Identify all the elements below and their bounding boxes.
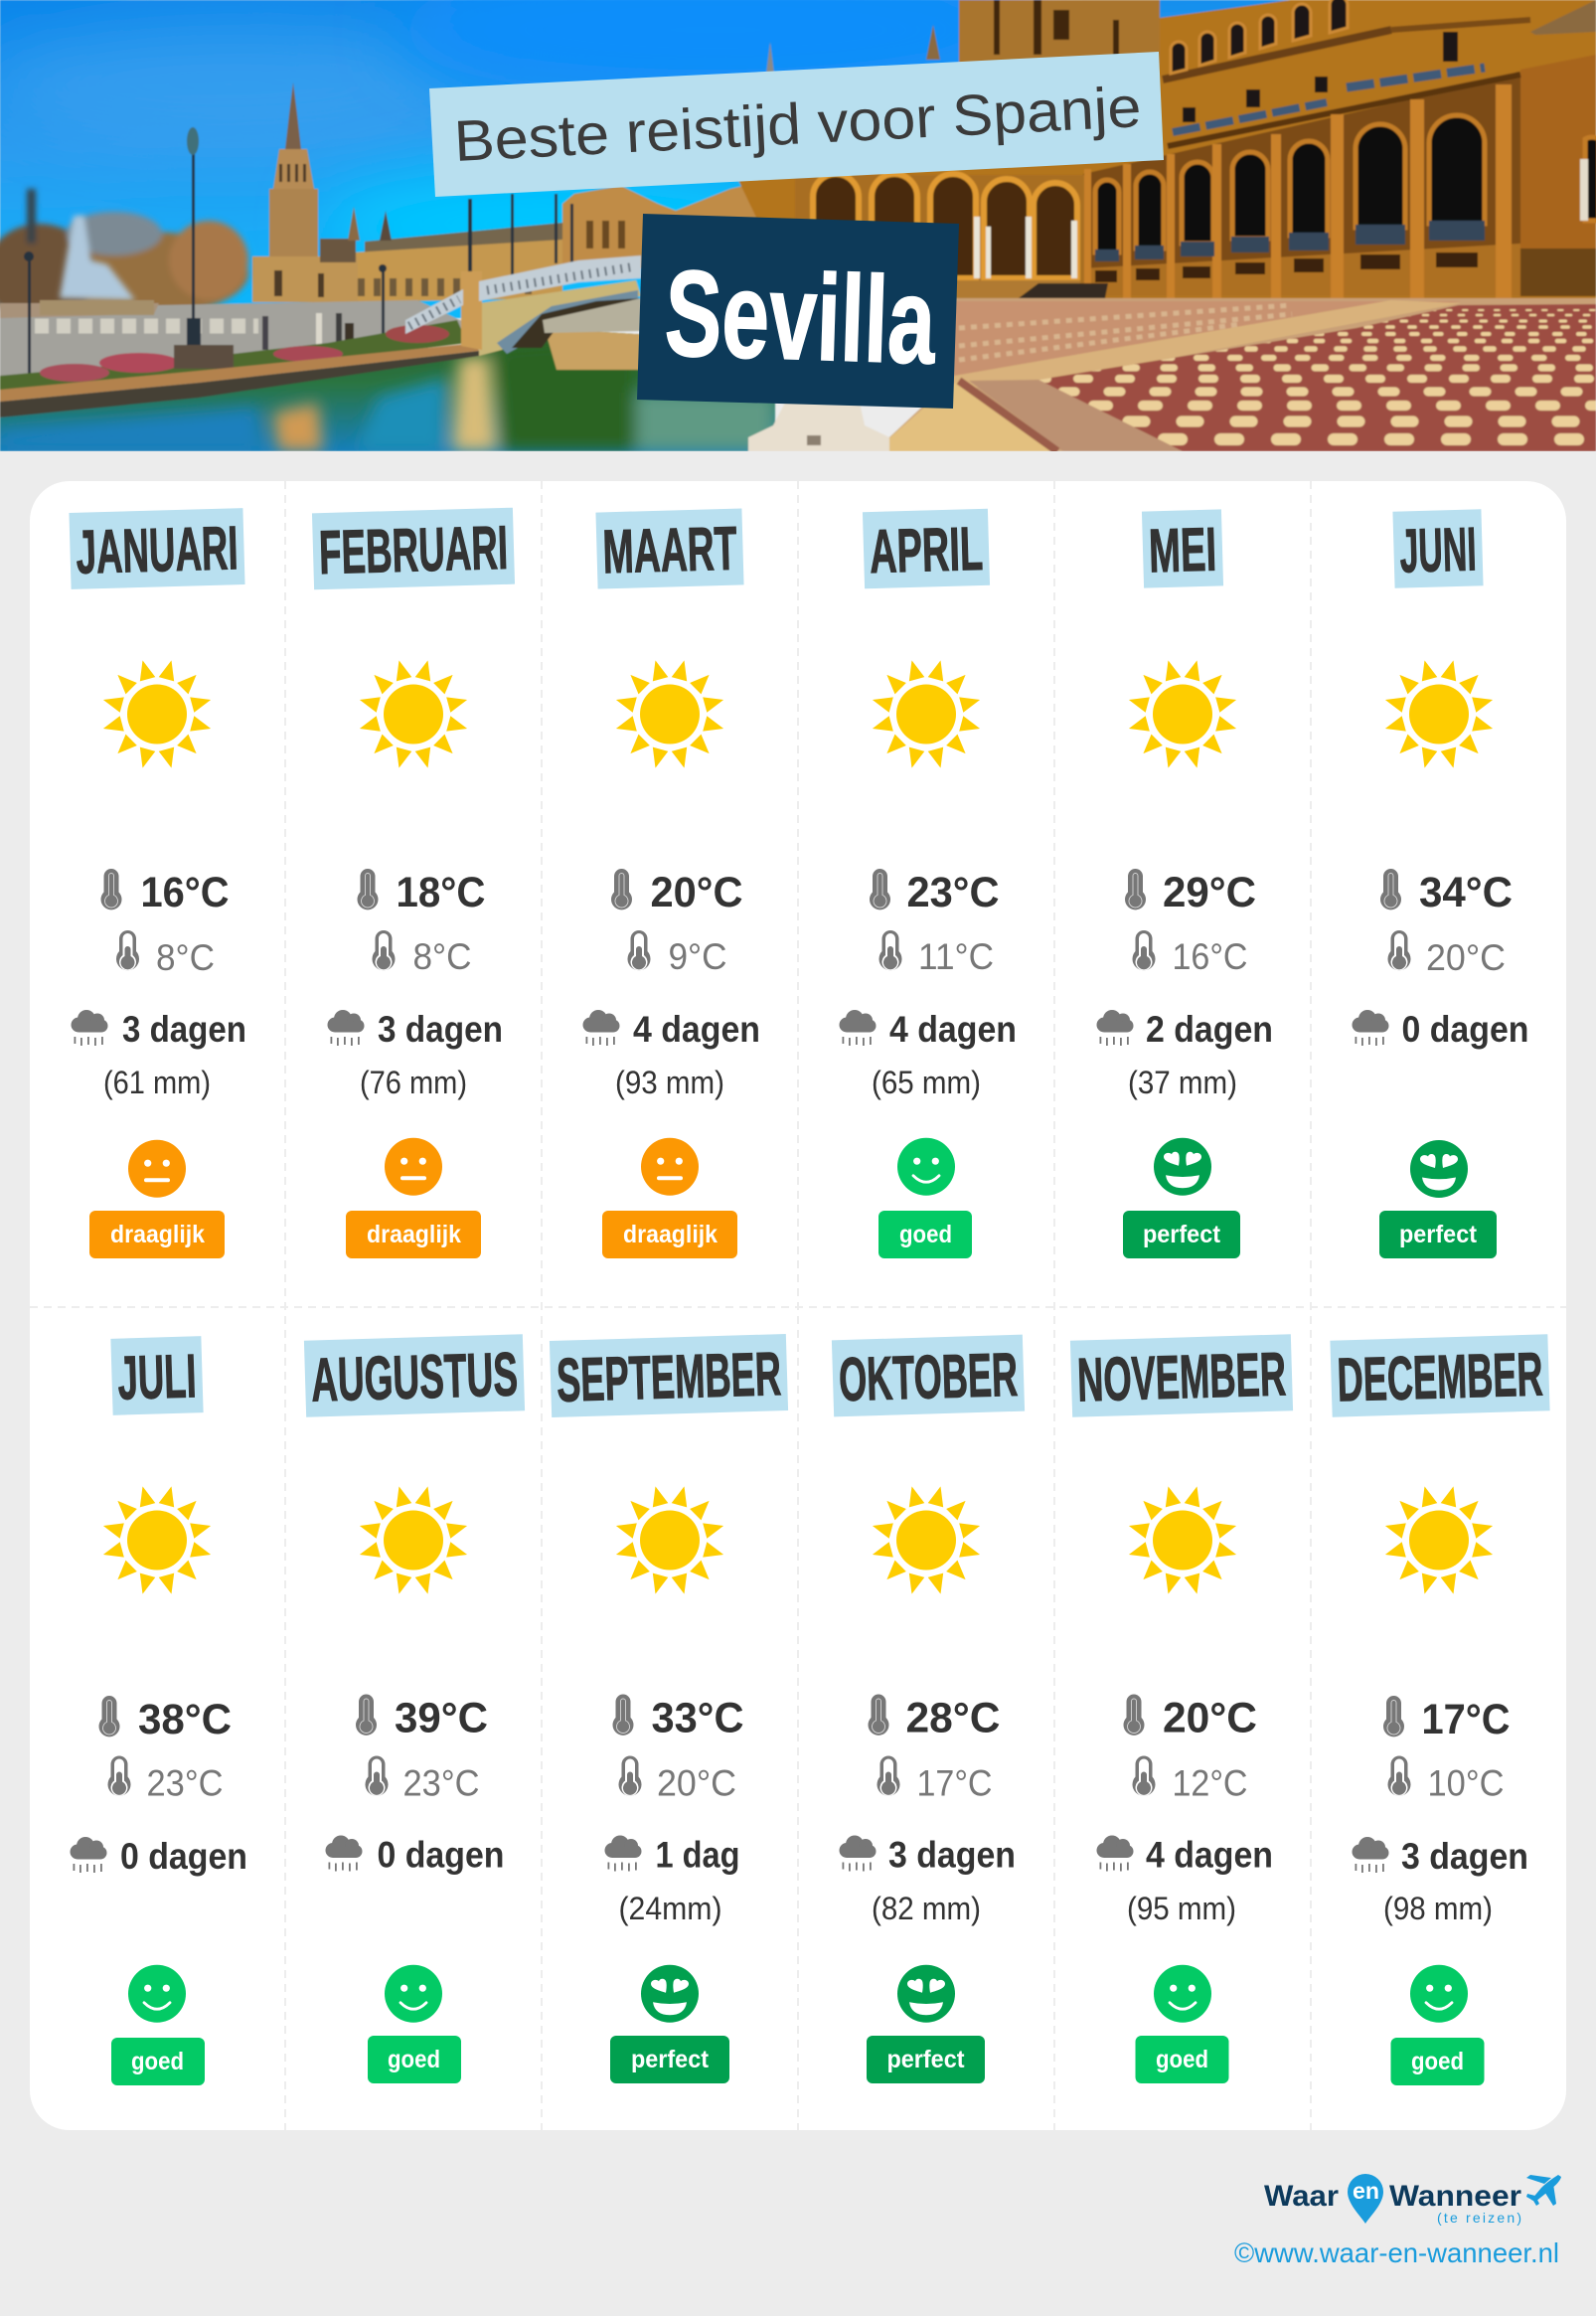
logo: Waar en Wanneer: Wanneer xyxy=(1389,2180,1521,2213)
rating badge: perfect xyxy=(1143,1221,1221,1248)
rain days: 2 dagen xyxy=(1146,1009,1273,1050)
min temperature xyxy=(1387,1755,1505,1803)
photo canal bank xyxy=(0,343,479,417)
photo plaza paving xyxy=(875,298,1596,451)
month label xyxy=(1070,1334,1293,1417)
rating badge: draaglijk xyxy=(110,1221,205,1248)
min temperature xyxy=(878,930,994,977)
rain days xyxy=(839,1835,1016,1875)
photo lamps and people xyxy=(24,127,573,385)
icon: sun xyxy=(101,658,213,770)
rating badge xyxy=(602,1211,737,1258)
min temperature: 20°C xyxy=(1426,937,1506,978)
max temperature xyxy=(101,869,229,916)
month label: NOVEMBER xyxy=(1076,1340,1287,1415)
icon: sun xyxy=(871,1484,982,1596)
icon: neutral face xyxy=(641,1138,699,1196)
rain days: 4 dagen xyxy=(889,1009,1017,1050)
max temperature xyxy=(1383,1696,1511,1743)
rain days xyxy=(70,1836,247,1877)
rating badge: perfect xyxy=(886,2046,965,2073)
photo right palace wall xyxy=(735,0,1596,298)
panel: augustus xyxy=(304,1334,525,2083)
panel: januari xyxy=(69,508,246,1258)
icon: happy face xyxy=(897,1138,955,1196)
max temperature xyxy=(99,1696,232,1743)
min temperature: 8°C xyxy=(413,936,471,977)
icon: sun xyxy=(614,1484,725,1596)
month label xyxy=(832,1335,1025,1416)
rain days xyxy=(72,1009,246,1050)
rain days: 0 dagen xyxy=(120,1836,247,1877)
min temperature: 20°C xyxy=(657,1763,736,1803)
photo trees xyxy=(0,189,248,323)
rainfall: (98 mm) xyxy=(1383,1891,1493,1926)
rating badge: perfect xyxy=(1399,1221,1478,1248)
photo: Plaza de España, Sevilla xyxy=(0,0,1596,451)
max temperature: 16°C xyxy=(141,869,229,916)
icon: sun xyxy=(358,1484,469,1596)
min temperature xyxy=(628,930,727,977)
icon: happy face xyxy=(128,1965,186,2023)
panel: mei xyxy=(1097,509,1273,1258)
min temperature: 17°C xyxy=(916,1763,992,1803)
icon: sun xyxy=(614,658,725,770)
max temperature xyxy=(358,869,485,916)
rating badge: goed xyxy=(1156,2046,1208,2073)
min temperature xyxy=(877,1755,992,1803)
rain days xyxy=(328,1009,503,1050)
month label xyxy=(312,508,515,589)
rain days: 0 dagen xyxy=(1401,1009,1528,1050)
rating badge xyxy=(111,2038,205,2085)
month label xyxy=(550,1334,788,1417)
panel: december xyxy=(1330,1334,1550,2085)
photo tower xyxy=(252,83,392,302)
icon: sun xyxy=(1383,1484,1495,1596)
rating badge xyxy=(1379,1211,1497,1258)
rating badge xyxy=(867,2036,985,2083)
rating badge xyxy=(368,2036,461,2083)
rain days xyxy=(604,1835,739,1875)
min temperature xyxy=(372,930,471,977)
month label xyxy=(595,508,744,589)
rating badge: goed xyxy=(1411,2048,1464,2075)
photo sky xyxy=(0,0,1290,320)
rain days xyxy=(326,1835,505,1875)
min temperature xyxy=(116,930,215,978)
icon: location pin: en xyxy=(1353,2178,1379,2204)
month label: MEI xyxy=(1148,516,1217,585)
panel: maart xyxy=(582,508,760,1258)
title banner xyxy=(429,52,1164,197)
max temperature: 18°C xyxy=(396,869,485,916)
photo fountain xyxy=(40,216,154,315)
month label: SEPTEMBER xyxy=(556,1340,782,1415)
rain days: 4 dagen xyxy=(1146,1835,1273,1875)
rain days xyxy=(582,1009,760,1050)
photo square xyxy=(0,299,462,376)
icon: sun xyxy=(358,658,469,770)
panel: juli xyxy=(70,1336,247,2085)
panel: oktober xyxy=(832,1335,1025,2083)
rain days xyxy=(1352,1836,1528,1877)
min temperature: 16°C xyxy=(1173,936,1248,977)
rating badge xyxy=(346,1211,481,1258)
rain days xyxy=(839,1009,1017,1050)
icon: love face xyxy=(1154,1138,1211,1196)
photo palace arcade left xyxy=(795,174,1088,299)
icon: love face xyxy=(641,1965,699,2023)
max temperature: 39°C xyxy=(395,1694,488,1741)
logo: Waar en Wanneer: (te reizen) xyxy=(1437,2210,1521,2226)
min temperature xyxy=(1133,930,1248,977)
month label xyxy=(1392,509,1484,588)
rainfall: (95 mm) xyxy=(1127,1891,1236,1926)
rainfall: (24mm) xyxy=(618,1891,721,1926)
max temperature: 20°C xyxy=(650,869,743,916)
max temperature: 38°C xyxy=(138,1696,232,1743)
max temperature xyxy=(1380,869,1513,916)
rating badge xyxy=(878,1211,972,1258)
icon: love face xyxy=(897,1965,955,2023)
max temperature: 34°C xyxy=(1419,869,1513,916)
month label xyxy=(69,508,245,589)
min temperature: 9°C xyxy=(668,936,727,977)
icon: sun xyxy=(1383,658,1495,770)
max temperature xyxy=(612,1694,743,1741)
rain days: 4 dagen xyxy=(633,1009,760,1050)
icon: happy face xyxy=(385,1965,442,2023)
panel: september xyxy=(550,1334,788,2083)
rating badge: draaglijk xyxy=(367,1221,461,1248)
max temperature: 23°C xyxy=(906,869,1000,916)
month label: AUGUSTUS xyxy=(310,1340,519,1415)
rain days: 3 dagen xyxy=(378,1009,503,1050)
min temperature: 11°C xyxy=(918,936,994,977)
icon: sun xyxy=(101,1484,213,1596)
panel: juni xyxy=(1352,509,1528,1258)
rain days: 1 dag xyxy=(656,1835,739,1875)
rainfall: (61 mm) xyxy=(103,1065,211,1100)
photo palace upper windows xyxy=(1171,0,1458,122)
rating badge: draaglijk xyxy=(623,1221,718,1248)
min temperature xyxy=(618,1755,736,1803)
month label xyxy=(863,509,990,588)
icon: sun xyxy=(1127,658,1238,770)
rainfall: (65 mm) xyxy=(872,1065,981,1100)
rain days: 3 dagen xyxy=(122,1009,246,1050)
icon: sun xyxy=(1127,1484,1238,1596)
month label: JANUARI xyxy=(76,514,239,587)
month label xyxy=(304,1334,525,1417)
icon: neutral face xyxy=(128,1140,186,1198)
icon: love face xyxy=(1410,1140,1468,1198)
icon: happy face xyxy=(1410,1965,1468,2023)
panel: februari xyxy=(312,508,515,1258)
rain days: 3 dagen xyxy=(1401,1836,1528,1877)
month label: JULI xyxy=(117,1342,198,1413)
month label: OKTOBER xyxy=(838,1341,1019,1414)
rating badge xyxy=(610,2036,729,2083)
rating badge xyxy=(1391,2038,1485,2085)
icon: location pin xyxy=(1348,2174,1383,2224)
rainfall: (93 mm) xyxy=(615,1065,724,1100)
photo stone pedestal xyxy=(748,403,889,451)
max temperature xyxy=(611,869,743,916)
photo palace big arches xyxy=(1019,84,1596,298)
max temperature: 28°C xyxy=(906,1694,1000,1741)
rating badge xyxy=(1123,1211,1240,1258)
month label xyxy=(110,1336,204,1415)
max temperature xyxy=(870,869,1000,916)
rating badge: goed xyxy=(388,2046,440,2073)
city banner: Sevilla xyxy=(637,214,959,409)
photo flower beds xyxy=(0,320,467,395)
month label: MAART xyxy=(602,515,738,586)
icon: sun xyxy=(871,658,982,770)
logo: Waar en Wanneer xyxy=(1264,2174,1561,2226)
min temperature xyxy=(1387,930,1506,978)
rain days xyxy=(1097,1835,1273,1875)
rain days: 0 dagen xyxy=(378,1835,505,1875)
website url: ©www.waar-en-wanneer.nl xyxy=(1234,2237,1559,2268)
rainfall: (37 mm) xyxy=(1128,1065,1237,1100)
max temperature: 17°C xyxy=(1421,1696,1511,1743)
icon: happy face xyxy=(1154,1965,1211,2023)
city banner: Sevilla: Sevilla xyxy=(663,246,938,391)
min temperature: 23°C xyxy=(403,1763,479,1803)
photo canal water xyxy=(0,330,776,451)
rating badge: perfect xyxy=(631,2046,710,2073)
icon: neutral face xyxy=(385,1138,442,1196)
panel: november xyxy=(1070,1334,1293,2083)
rain days xyxy=(1352,1009,1528,1050)
rating badge xyxy=(89,1211,225,1258)
min temperature: 8°C xyxy=(156,937,215,978)
rating badge xyxy=(1135,2036,1228,2083)
min temperature xyxy=(366,1755,479,1803)
photo distant palace xyxy=(354,185,757,302)
month label: FEBRUARI xyxy=(318,514,509,587)
rating badge: goed xyxy=(131,2048,184,2075)
photo bridge xyxy=(405,255,641,356)
min temperature xyxy=(1133,1755,1248,1803)
min temperature: 23°C xyxy=(147,1763,223,1803)
month label: APRIL xyxy=(869,515,984,586)
max temperature: 29°C xyxy=(1163,869,1256,916)
rain days xyxy=(1097,1009,1273,1050)
title banner: Beste reistijd voor Spanje xyxy=(452,75,1143,174)
icon: airplane xyxy=(1526,2175,1561,2206)
rainfall: (82 mm) xyxy=(872,1891,981,1926)
rainfall: (76 mm) xyxy=(360,1065,467,1100)
max temperature: 20°C xyxy=(1163,1694,1257,1741)
climate table card xyxy=(30,481,1566,2130)
month label xyxy=(1142,509,1223,588)
max temperature xyxy=(356,1694,488,1741)
month label: JUNI xyxy=(1399,515,1478,586)
logo: Waar en Wanneer: Waar xyxy=(1264,2180,1339,2213)
rain days: 3 dagen xyxy=(888,1835,1016,1875)
min temperature xyxy=(107,1755,223,1803)
max temperature: 33°C xyxy=(652,1694,743,1741)
rating badge: goed xyxy=(899,1221,952,1248)
min temperature: 10°C xyxy=(1427,1763,1505,1803)
panel: april xyxy=(839,509,1017,1258)
min temperature: 12°C xyxy=(1173,1763,1248,1803)
